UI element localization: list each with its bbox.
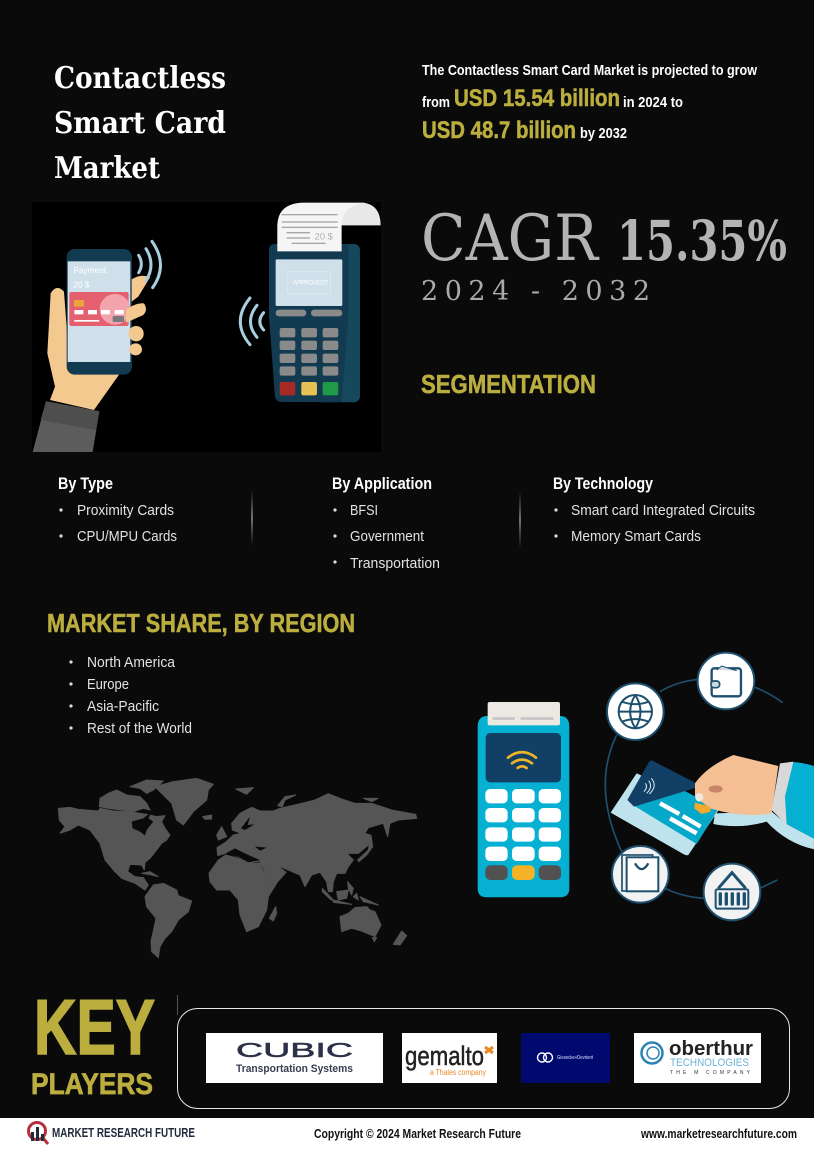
icon: basket circle [704, 864, 760, 920]
market projection text: in 2024 to [623, 94, 683, 111]
icon: orbit connecting lines [605, 679, 783, 898]
icon: payment terminal: APPROVED? [293, 281, 329, 287]
logo: cubic [206, 1033, 383, 1083]
title: Market [54, 151, 160, 186]
map: europe asia africa oceania [209, 788, 417, 945]
market projection text: USD 15.54 billion [454, 85, 620, 112]
region list: North America [87, 654, 176, 671]
logo: gemalto [402, 1033, 497, 1083]
icon: phone: Payment [73, 265, 107, 275]
icon: fingers [113, 276, 150, 355]
segment: by type [58, 474, 177, 545]
segment: by type: CPU/MPU Cards [77, 528, 177, 545]
illustration: teal card reader [478, 653, 814, 920]
map: americas [58, 778, 213, 958]
market projection text: The Contactless Smart Card Market is projected to grow [422, 62, 757, 79]
key players heading [31, 983, 155, 1101]
market projection text: from [422, 94, 450, 111]
key players heading: KEY [34, 983, 155, 1071]
icon: teal terminal [478, 702, 569, 897]
icon: phone: 20 $ [73, 280, 90, 290]
segment: by type: Proximity Cards [77, 502, 174, 519]
logo: giesecke devrient: Giesecke+Devrient [557, 1055, 594, 1061]
logo: market research future: MARKET RESEARCH FUTURE [52, 1126, 195, 1140]
icon: receipt: 20 $ [315, 231, 334, 241]
market projection text [422, 62, 757, 144]
icon: payment terminal [269, 244, 360, 402]
icon: wallet circle [698, 653, 754, 709]
CAGR figure [421, 202, 787, 307]
segment: by type: By Type [58, 474, 113, 493]
footer [0, 1118, 814, 1150]
icon: terminal signal waves [240, 298, 264, 345]
logo: oberthur: TECHNOLOGIES [670, 1057, 749, 1069]
segment: by technology: By Technology [553, 474, 653, 493]
icon: sleeve shadow [713, 812, 814, 849]
logo: oberthur: THE M COMPANY [670, 1070, 751, 1076]
copyright: Copyright © 2024 Market Research Future [314, 1127, 521, 1141]
logo: oberthur [634, 1033, 761, 1083]
segment: by technology: Smart card Integrated Circuits [571, 502, 755, 519]
icon: shopping bag circle [612, 846, 669, 903]
segment: by application: Government [350, 528, 425, 545]
world map [58, 778, 417, 958]
market projection text: USD 48.7 billion [422, 117, 576, 144]
logo: cubic: Transportation Systems [236, 1063, 353, 1075]
segment: by technology [553, 474, 755, 545]
logo: gemalto: a Thales company [430, 1068, 486, 1077]
logo: market research future [28, 1122, 195, 1144]
region list: Rest of the World [87, 720, 192, 737]
CAGR figure: 2024 - 2032 [421, 276, 650, 307]
icon: sleeve [772, 762, 814, 839]
icon: cards and reader [611, 760, 719, 855]
market projection text: by 2032 [580, 125, 627, 142]
icon: sleeve [33, 401, 99, 452]
key players heading: PLAYERS [31, 1068, 153, 1101]
key players panel [178, 1008, 790, 1108]
logo: gemalto: gemalto [405, 1041, 484, 1071]
title: Contactless [54, 61, 226, 96]
icon: receipt [277, 203, 381, 251]
icon: phone [67, 249, 132, 375]
segmentation heading: SEGMENTATION [421, 369, 596, 399]
region list: Europe [87, 676, 129, 693]
logo: giesecke devrient [521, 1033, 610, 1083]
logo: oberthur: oberthur [669, 1038, 753, 1060]
segment: by application: Transportation [350, 555, 440, 572]
icon: phone signal waves [139, 241, 160, 288]
segment: by technology: Memory Smart Cards [571, 528, 701, 545]
logo: cubic: CUBIC [236, 1040, 353, 1062]
illustration: phone paying at card terminal [32, 202, 381, 452]
title: Smart Card [54, 106, 226, 141]
title [54, 61, 226, 186]
market share heading: MARKET SHARE, BY REGION [47, 608, 355, 638]
segment: by application: BFSI [350, 502, 378, 519]
icon: hand behind phone [47, 288, 120, 410]
icon: hand with card [694, 755, 778, 815]
CAGR figure: CAGR [421, 202, 600, 276]
icon: globe circle [607, 683, 664, 740]
region list [69, 654, 192, 737]
region list: Asia-Pacific [87, 698, 159, 715]
segment: by application: By Application [332, 474, 432, 493]
segment: by application [332, 474, 440, 572]
